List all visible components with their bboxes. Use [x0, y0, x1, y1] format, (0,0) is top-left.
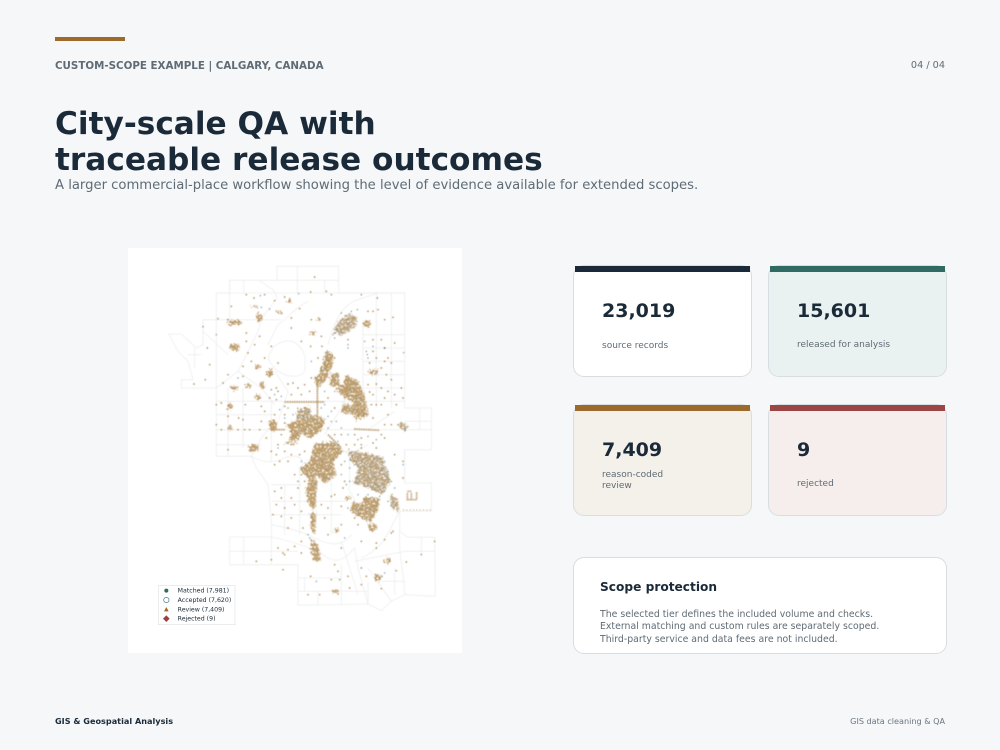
value: 23,019: [602, 300, 675, 322]
eyebrow label: CUSTOM-SCOPE EXAMPLE | CALGARY, CANADA: [55, 60, 324, 72]
legend marker: matched: [164, 589, 168, 593]
panel heading: Scope protection: [600, 580, 717, 594]
footer left: GIS & Geospatial Analysis: [55, 716, 173, 726]
panel text: The selected tier defines the included volume and checks.: [600, 609, 873, 620]
panel: scope protection: [573, 557, 947, 654]
card accent: [575, 266, 750, 272]
legend marker: rejected: [163, 615, 170, 622]
subtitle: A larger commercial-place workflow showing the level of evidence available for extended scopes.: [55, 178, 698, 193]
dense record clusters: [226, 300, 407, 593]
label: [602, 470, 663, 491]
title: traceable release outcomes: [55, 142, 543, 178]
linear corridors of records: [271, 381, 431, 531]
card accent: [770, 266, 945, 272]
stat card: source records: [573, 265, 752, 377]
title: City-scale QA with: [55, 106, 376, 142]
map legend: [158, 586, 235, 625]
scattered accepted records: [216, 294, 404, 581]
accent bar: [55, 37, 125, 41]
value: 9: [797, 439, 810, 461]
legend marker: review: [164, 607, 169, 611]
page number: 04 / 04: [911, 60, 945, 71]
label: source records: [602, 341, 668, 351]
stat card: reason-coded review: [573, 404, 752, 516]
card accent: [575, 405, 750, 411]
value: 15,601: [797, 300, 870, 322]
title: [55, 106, 543, 178]
legend labels: Rejected (9): [178, 616, 216, 623]
footer right: GIS data cleaning & QA: [850, 716, 945, 726]
scattered review records: [194, 277, 435, 595]
legend labels: Accepted (7,620): [178, 597, 231, 604]
panel text: [600, 609, 879, 645]
legend labels: Matched (7,981): [178, 588, 229, 595]
label: rejected: [797, 479, 834, 489]
label: released for analysis: [797, 340, 890, 350]
stat card: released for analysis: [768, 265, 947, 377]
panel text: Third-party service and data fees are not included.: [600, 634, 838, 645]
card accent: [770, 405, 945, 411]
label: reason-coded: [602, 470, 663, 480]
legend marker: accepted: [164, 597, 169, 603]
panel text: External matching and custom rules are separately scoped.: [600, 621, 879, 632]
map background: [128, 248, 462, 653]
panel: Calgary map: [128, 248, 462, 653]
label: review: [602, 481, 632, 491]
stat card: rejected: [768, 404, 947, 516]
city boundary and roads: [169, 266, 435, 611]
legend labels: [178, 588, 231, 623]
value: 7,409: [602, 439, 662, 461]
legend labels: Review (7,409): [178, 606, 224, 613]
